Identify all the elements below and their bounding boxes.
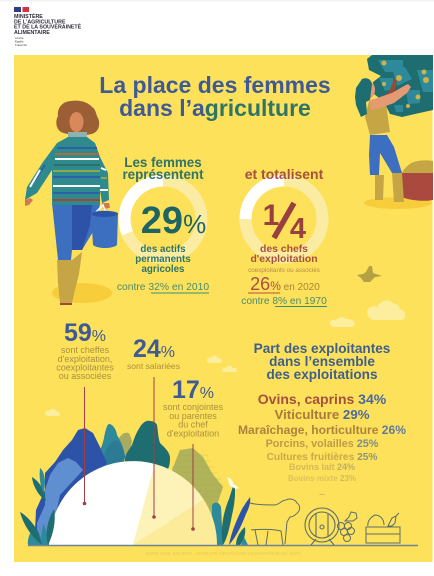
logo: ministry of agriculture [14, 7, 82, 47]
icon: flying bird [357, 266, 382, 282]
ranked list: share of women farmers by sector: Bovins mixte 23% [288, 474, 356, 483]
logo: ministry of agriculture: ALIMENTAIRE [14, 30, 50, 36]
chart: semicircle of women workers by status [49, 461, 217, 545]
clouds [45, 300, 405, 416]
logo: ministry of agriculture: DE L'AGRICULTURE [14, 19, 66, 25]
figure: 29%: 29% [141, 200, 206, 242]
ranked list: share of women farmers by sector: Porcins, volailles 25% [266, 438, 379, 450]
caption: des chefs d'exploitation: coexploitants ou associés [248, 267, 320, 274]
caption: des actifs permanents agricoles [135, 244, 191, 275]
stat: 17%: 17% [172, 376, 214, 404]
icon: white bird on plant [227, 477, 239, 489]
stat: 59%: ou associées [59, 371, 112, 381]
heading: et totalisent: et totalisent [245, 166, 324, 182]
ranked list: share of women farmers by sector: Bovins lait 24% [289, 462, 355, 472]
stat: 24%: 24% [133, 335, 175, 363]
caption: des actifs permanents agricoles: permanents [135, 254, 191, 265]
figure: one quarter: 4 [290, 213, 306, 245]
icon: crate of vegetables [366, 513, 400, 543]
stat: 17%: sont conjointes [163, 402, 224, 412]
logo: ministry of agriculture: Fraternité [15, 43, 27, 47]
stat: 17%: d'exploitation [167, 428, 219, 438]
ground line [28, 544, 418, 546]
logo: ministry of agriculture: Liberté [15, 36, 24, 40]
stat: 17% [163, 376, 224, 438]
heading: les femmes représentent: représentent [122, 167, 204, 182]
source note: MARS 2024. SOURCE : AGRESTE GRAPHAGRI (QUESTIONNÉ EN 2020) [145, 550, 301, 556]
caption: des actifs permanents agricoles: agricoles [141, 264, 185, 275]
ranked list: share of women farmers by sector [238, 391, 406, 497]
stat: 17%: ou parentes [169, 411, 217, 421]
heading: part des exploitantes: des exploitations [266, 367, 378, 382]
ranked list: share of women farmers by sector: Ovins, caprins 34% [258, 391, 387, 407]
caption: des chefs d'exploitation: d'exploitation [250, 254, 318, 265]
stat: 59% [56, 319, 114, 381]
comparison: contre 8% en 1970: contre 8% en 1970 [241, 296, 327, 307]
stat: 17%: du chef [178, 420, 208, 430]
heading: part des exploitantes: Part des exploitantes [254, 341, 390, 356]
heading: les femmes représentent [122, 155, 204, 182]
heading: part des exploitantes: dans l’ensemble [269, 354, 375, 369]
logo: ministry of agriculture: Égalité [15, 38, 24, 44]
donut chart: one quarter [246, 180, 322, 258]
icon: barrel [305, 508, 339, 545]
stat: 59%: d'exploitation, [58, 354, 112, 364]
icon: sheep [250, 499, 300, 545]
ranked list: share of women farmers by sector: ... [319, 490, 325, 497]
heading: les femmes représentent: Les femmes [124, 155, 202, 170]
heading: part des exploitantes [254, 341, 390, 382]
callout: women represent 29% of active workers [117, 155, 209, 293]
caption: des actifs permanents agricoles: des actifs [140, 244, 186, 255]
plants right of the semicircle [222, 483, 250, 545]
caption: des chefs d'exploitation: des chefs [260, 244, 308, 255]
illustration: trees behind the semicircle [35, 421, 223, 545]
comparison: contre 32% en 2010: contre 32% en 2010 [117, 282, 209, 293]
stat: 24% [127, 335, 180, 371]
illustration: woman picking fruit from a tree [355, 55, 433, 209]
title: dans l’agriculture [119, 95, 311, 121]
logo: ministry of agriculture: MINISTÈRE [14, 12, 43, 20]
logo: ministry of agriculture: ET DE LA SOUVERAINETÉ [14, 23, 82, 31]
icon: grapes [338, 512, 357, 542]
ranked list: share of women farmers by sector: Cultures fruitières 25% [267, 452, 377, 463]
illustration: woman carrying a bucket [25, 101, 118, 305]
title: La place des femmes [99, 72, 331, 98]
caption: des chefs d'exploitation [248, 244, 320, 274]
title [99, 72, 331, 121]
stat: 59%: 59% [64, 319, 106, 347]
annotation lines with end dots [83, 377, 195, 531]
plants in the foreground [20, 468, 55, 545]
ranked list: share of women farmers by sector: Viticulture 29% [274, 407, 370, 422]
donut chart: 29% [124, 180, 202, 258]
stat: 59%: coexploitantes [56, 362, 114, 372]
callout: women make up one quarter of farm heads [241, 166, 327, 307]
figure: one quarter: 1 [263, 199, 279, 232]
figure: 26% en 2020: 26% en 2020 [250, 274, 320, 294]
ranked list: share of women farmers by sector: Maraîchage, horticulture 26% [238, 423, 406, 437]
figure: one quarter [263, 199, 306, 245]
stat: 59%: sont cheffes [61, 345, 110, 355]
stat: 24%: sont salariées [127, 361, 180, 371]
